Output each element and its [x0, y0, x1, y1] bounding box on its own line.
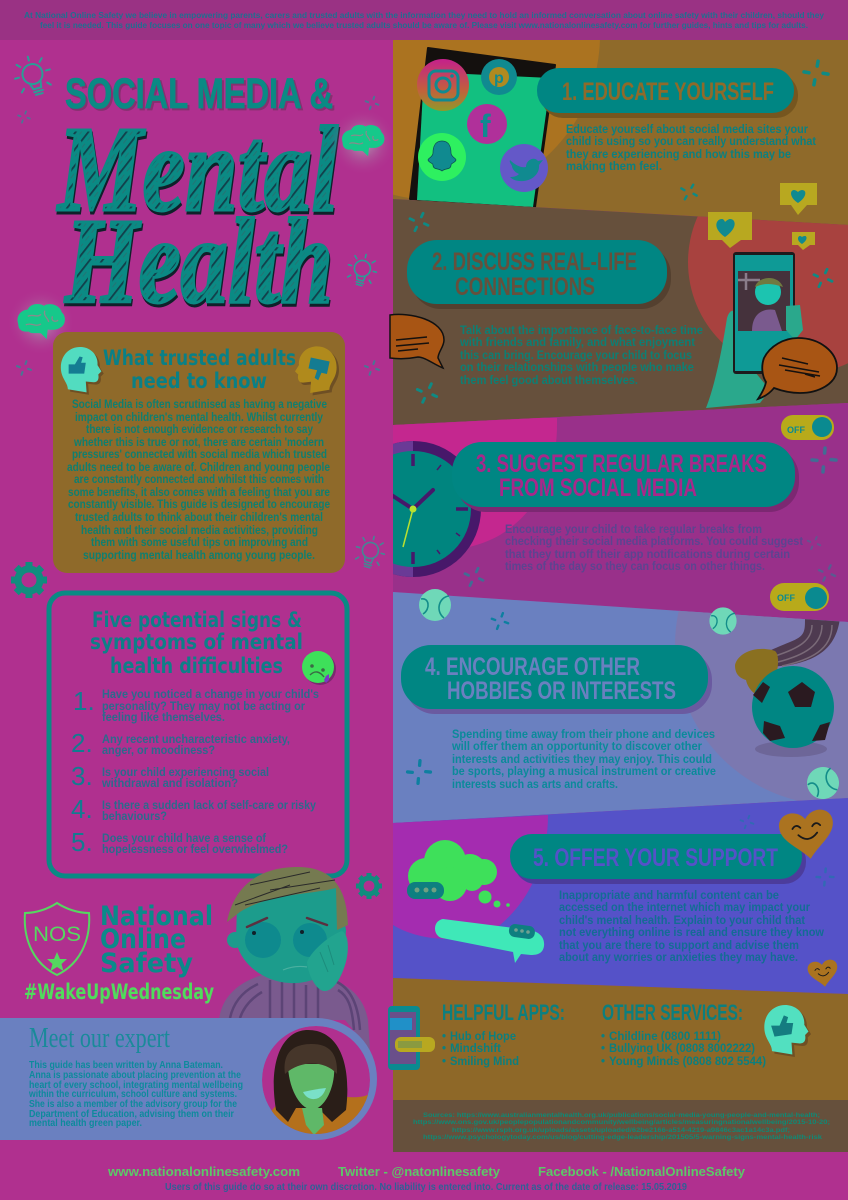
section 2: discuss real-life connections [389, 183, 848, 425]
list item 2 [71, 728, 290, 758]
biography text [28, 1059, 243, 1129]
logo wordmark: Online [100, 924, 186, 955]
icon: light bulb right [344, 251, 380, 288]
text: support body [559, 890, 824, 964]
toggle: off switch 2 [770, 583, 829, 611]
list item 1: 1. [73, 686, 95, 716]
text: other services: Childline (0800 1111) [609, 1031, 721, 1043]
text: breaks body [505, 524, 803, 573]
text: breaks body: times of the day so they can focus on other things. [505, 561, 765, 573]
toggle: off switch 2: OFF [777, 593, 795, 603]
text: other services [601, 1000, 766, 1068]
text: helpful apps: HELPFUL APPS: [442, 1000, 565, 1025]
text: helpful apps [442, 1000, 565, 1068]
icon: brain top right [329, 108, 397, 176]
icon: light bulb top left [10, 52, 55, 99]
sparkles [739, 814, 834, 886]
illustration: phone with social icons [410, 48, 555, 207]
section 3: suggest regular breaks [345, 403, 848, 622]
text: discuss body [459, 325, 703, 387]
text: breaks body: checking their social media platforms. You could suggest [505, 536, 803, 548]
heading: Meet our expert [29, 1022, 170, 1054]
header intro strip: At National Online Safety we believe in empowering parents, carers and trusted adults with the information they need to hold an informed conversation about online safety with their children, should they [24, 11, 825, 20]
text: discuss body: them feel good about themselves. [460, 375, 638, 387]
mouth [283, 966, 307, 970]
header intro strip: feel it is needed. This guide focuses on one topic of many which we believe trusted adults should be aware of. Please visit www.nationalonlinesafety.com for further guides, hints and tips for adults. [40, 21, 808, 30]
banner: regular breaks [452, 442, 799, 512]
text: support body: Inappropriate and harmful content can be [559, 890, 779, 902]
icon: sad face [302, 651, 336, 685]
shirt [219, 975, 370, 1050]
title: social media and mental health [56, 70, 338, 329]
text: other services: Young Minds (0808 802 5544) [609, 1056, 766, 1068]
icon: green thought cloud [407, 840, 510, 908]
text: breaks body: that they turn off their app notifications during certain [505, 549, 790, 561]
list item 2: anger, or moodiness? [102, 745, 215, 757]
text: helpful apps: Smiling Mind [450, 1056, 519, 1068]
illustration: clock [393, 441, 481, 577]
list item 5: hopelessness or feel overwhelmed? [102, 844, 288, 856]
text: support body: that you are there to support and advise them [559, 940, 799, 952]
list item 2: Any recent uncharacteristic anxiety, [102, 734, 290, 746]
text: helpful apps: • [442, 1043, 446, 1055]
sources panel [393, 1100, 848, 1152]
logo: national online safety [24, 901, 214, 1004]
biography text: She is also a member of the advisory group for the [29, 1098, 237, 1110]
list item 4: 4. [71, 794, 93, 824]
disclaimer: Users of this guide do so at their own discretion. No liability is entered into. Current as of the date of release: 15.05.2019 [165, 1182, 687, 1193]
banner: hobbies: 4. ENCOURAGE OTHER [425, 653, 640, 681]
body text: whether this is true or not, there are certain 'modern [73, 437, 324, 449]
banner: educate yourself [537, 68, 798, 118]
biography text: heart of every school, integrating mental wellbeing [29, 1079, 243, 1091]
toggle: off switch 1 [781, 415, 834, 440]
text: helpful apps: • [442, 1031, 446, 1043]
icons: tennis balls [419, 589, 845, 805]
text: educate body: Educate yourself about social media sites your [566, 124, 808, 136]
biography text: within the curriculum, school culture and systems. [28, 1088, 237, 1100]
text: discuss body: on their relationships with people who make [460, 362, 694, 374]
icon: speech bubble right [758, 338, 837, 399]
icon: thumbs up head [764, 1005, 811, 1057]
text: educate body: child is using so you can really understand what [566, 136, 816, 148]
sparkles [461, 447, 838, 590]
body text: adults need to be aware of. Children and young people [67, 462, 330, 474]
list item 4 [71, 794, 317, 824]
twitter: Twitter - @natonlinesafety [338, 1164, 501, 1179]
body text: Social Media is often scrutinised as having a negative [72, 399, 327, 411]
expert portrait [262, 1026, 372, 1140]
ears [227, 932, 243, 948]
icon: shield [25, 903, 89, 975]
sources panel: Sources: https://www.australianmentalhealth.org.uk/publications/social-media-young-people-and-mental-health; [423, 1112, 820, 1119]
list item 5: 5. [71, 827, 93, 857]
banner: discuss: 2. DISCUSS REAL-LIFE [432, 248, 637, 276]
text: educate body [566, 124, 816, 173]
section: helpful apps and services [388, 978, 848, 1100]
list item 1 [73, 686, 319, 724]
hand [307, 931, 348, 991]
icon: shield: NOS [33, 923, 81, 946]
icon: instagram [417, 59, 469, 111]
section 4: encourage other hobbies [393, 415, 848, 823]
header intro strip [0, 0, 848, 40]
footer [107, 1164, 746, 1193]
list item 5 [71, 827, 288, 857]
banner: discuss: CONNECTIONS [455, 273, 595, 301]
body text: impact on children's mental health. Whilst currently [75, 412, 324, 424]
heading: mental: Mental [56, 102, 338, 237]
illustration: leg and football [735, 618, 840, 757]
sources panel: https://www.rsph.org.uk/uploads/assets/uploaded/62be2166-a514-4219-a9846c3ac1a14c3a.pdf; [452, 1127, 790, 1134]
panel: five potential signs and symptoms [49, 593, 347, 876]
body text: constantly visible. This guide is designed to encourage [68, 499, 330, 511]
facebook: Facebook - /NationalOnlineSafety [538, 1164, 746, 1179]
icons: heart notifications [708, 183, 817, 250]
text: discuss body: Talk about the importance of face-to-face time [460, 325, 703, 337]
text: other services: • [601, 1043, 605, 1055]
list item 3: Is your child experiencing social [102, 767, 269, 779]
sparkles [406, 209, 836, 407]
panel: what trusted adults need to know [53, 332, 345, 573]
illustration: worried boy [219, 867, 370, 1050]
body text: supporting mental health among young people. [83, 550, 315, 562]
heading: Five potential signs & [92, 608, 302, 632]
text: helpful apps: Hub of Hope [450, 1031, 516, 1043]
text: hobbies body: Spending time away from their phone and devices [452, 729, 715, 741]
body text: some benefits, it also comes with a feeling that you are [68, 487, 330, 499]
logo wordmark: National [100, 901, 213, 932]
icon: thumbs down head [295, 346, 339, 395]
biography text: Department of Education, advising them on their [29, 1108, 234, 1120]
banner: hobbies: HOBBIES OR INTERESTS [447, 677, 676, 705]
icon: mint speech bubble [435, 919, 544, 963]
text: hobbies body: be sports, playing a musical instrument or creative [452, 766, 716, 778]
sources panel: https://www.ons.gov.uk/peoplepopulationandcommunity/wellbeing/articles/measuringnationalwellbeing/2015-10-20; [413, 1119, 830, 1126]
left decorative icons [7, 52, 397, 899]
icon: pinterest: p [494, 70, 504, 87]
list item 2: 2. [71, 728, 93, 758]
banner: support [510, 834, 806, 884]
heading: What trusted adults [103, 346, 296, 370]
biography text: mental health green paper. [29, 1117, 142, 1129]
text: educate body: making them feel. [566, 161, 662, 173]
section 1: educate yourself [393, 40, 848, 225]
text: breaks body: Encourage your child to take regular breaks from [505, 524, 762, 536]
text: educate body: they are experiencing and how this may be [566, 149, 791, 161]
logo wordmark [100, 901, 213, 979]
icon: thumbs up head [61, 347, 104, 395]
list item 1: personality? They may not be acting or [102, 701, 305, 713]
icon: phone with chat [388, 1006, 435, 1070]
icon: facebook [467, 104, 507, 144]
text: support body: accessed on the internet which may impact your [559, 902, 810, 914]
body text: health and their social media activities, providing [81, 525, 318, 537]
icon: snapchat [418, 133, 466, 181]
logo wordmark: Safety [100, 948, 193, 979]
banner: educate yourself: 1. EDUCATE YOURSELF [562, 78, 774, 106]
icon: gear right [356, 873, 382, 899]
text: support body: about any worries or anxieties they may have. [559, 952, 798, 964]
text: other services: Bullying UK (0808 8002222) [609, 1043, 755, 1055]
list item 4: Is there a sudden lack of self-care or risky [102, 800, 317, 812]
icon: gear left [11, 562, 47, 598]
panel: what trusted adults need to know: need to know [131, 369, 267, 393]
text: other services: OTHER SERVICES: [602, 1000, 743, 1025]
eyebrows [247, 918, 327, 927]
text: hobbies body: will offer them an opportunity to discover other [451, 741, 702, 753]
banner: discuss [407, 240, 671, 309]
sparkles [678, 59, 830, 203]
text: discuss body: this can bring. Encourage your child to focus [460, 350, 692, 362]
website: www.nationalonlinesafety.com [107, 1164, 300, 1179]
panel: five potential signs and symptoms: health difficulties [110, 654, 283, 678]
text: other services: • [601, 1031, 605, 1043]
sparkles left column [15, 95, 381, 377]
text: discuss body: with friends and family, and what enjoyment [459, 337, 695, 349]
text: hobbies body [451, 729, 716, 791]
list item 3: withdrawal and isolation? [101, 778, 238, 790]
banner: hobbies [401, 645, 712, 714]
biography text: Anna is passionate about placing prevention at the [29, 1069, 241, 1081]
body text: are constantly connected and whilst this comes with [74, 474, 324, 486]
text: helpful apps: Mindshift [450, 1043, 501, 1055]
icon: smiling heart large [777, 808, 838, 863]
text: support body: not everything online is real and ensure they know [559, 927, 824, 939]
text: helpful apps: • [442, 1056, 446, 1068]
body text: pressures' connected with social media which trusted [72, 449, 327, 461]
text: hobbies body: interests such as arts and crafts. [452, 779, 618, 791]
list item 1: feeling like themselves. [102, 712, 225, 724]
biography text: This guide has been written by Anna Bateman. [29, 1059, 223, 1071]
heading: health: Health [64, 194, 333, 329]
section 5: offer your support [393, 798, 848, 994]
panel: five potential signs and symptoms: symptoms of mental [90, 630, 303, 654]
icon: pinterest [481, 59, 517, 95]
heading: social media: SOCIAL MEDIA & [65, 70, 333, 118]
text: support body: child's mental health. Explain to your child that [559, 915, 805, 927]
banner: support: 5. OFFER YOUR SUPPORT [533, 844, 778, 872]
body text: trusted adults to think about their children's mental [75, 512, 323, 524]
list item 1: Have you noticed a change in your child's [102, 689, 319, 701]
sparkles [407, 610, 511, 784]
head [236, 885, 346, 983]
toggle: off switch 1: OFF [787, 425, 805, 435]
body text: them with some useful tips on improving and [91, 537, 308, 549]
body text [67, 399, 330, 562]
text: hobbies body: interests and activities they may enjoy. This could [452, 754, 712, 766]
banner: regular breaks: FROM SOCIAL MEDIA [499, 474, 697, 502]
icon: facebook: f [480, 108, 491, 144]
list item 3: 3. [71, 761, 93, 791]
illustration: hand holding phone [706, 252, 803, 408]
eye circles [245, 922, 281, 958]
icon: brain lower left [7, 288, 75, 356]
list item 5: Does your child have a sense of [102, 833, 266, 845]
icon: twitter [500, 144, 548, 192]
sources panel: https://www.psychologytoday.com/us/blog/cutting-edge-leadership/201505/5-warning-signs-mental-health-risk [423, 1134, 822, 1141]
icon: light bulb by panel [352, 533, 388, 570]
body text: there is not enough evidence or research to say [86, 424, 314, 436]
hashtag: #WakeUpWednesday [24, 980, 214, 1004]
text: other services: • [601, 1056, 605, 1068]
icon: speech bubble left [390, 314, 444, 368]
panel: meet our expert [0, 1018, 377, 1140]
icon: smiling heart small [807, 959, 840, 989]
list item 3 [71, 761, 269, 791]
list item 4: behaviours? [102, 811, 167, 823]
hair [227, 867, 348, 930]
